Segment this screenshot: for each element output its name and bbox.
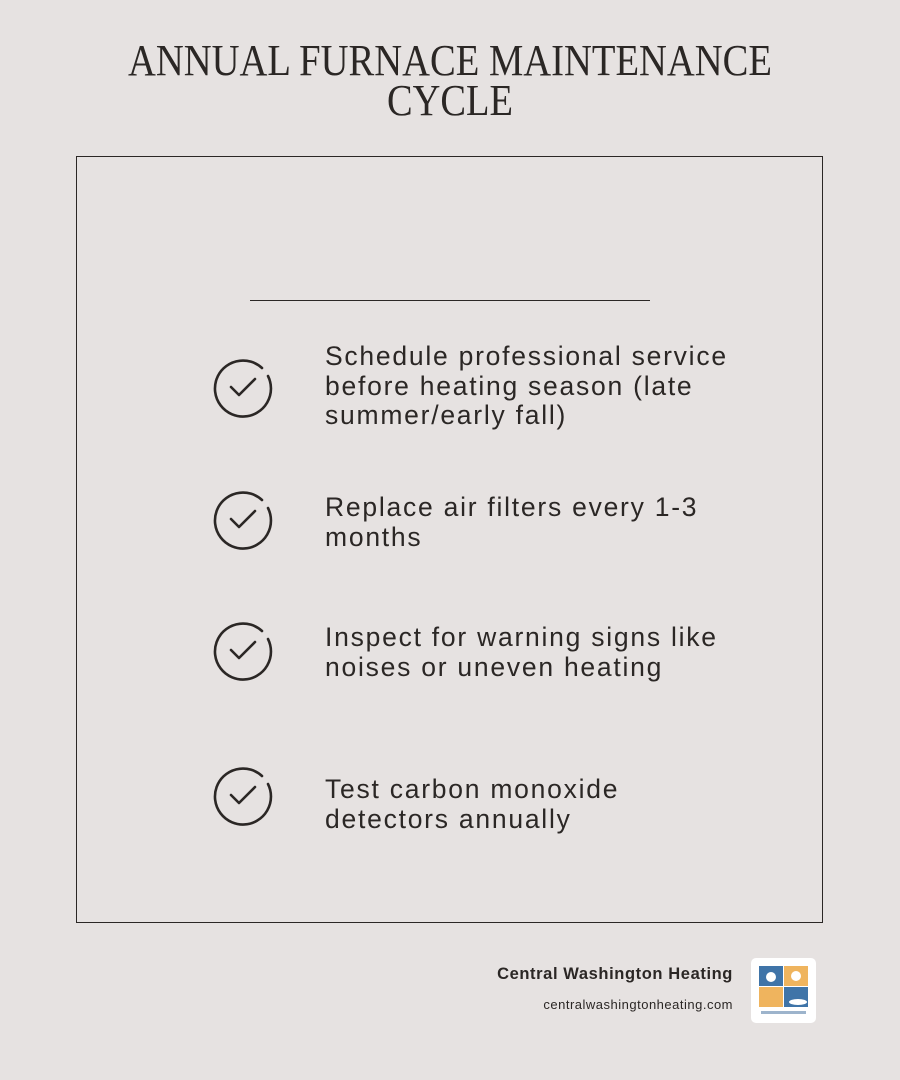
text: item 3: Inspect for warning signs like	[325, 622, 718, 652]
text: item 3: noises or uneven heating	[325, 652, 663, 682]
text: item 2: months	[325, 522, 422, 552]
footer: url: centralwashingtonheating.com	[543, 997, 733, 1012]
title	[128, 36, 772, 125]
text: item 1	[325, 341, 728, 430]
text: item 4: Test carbon monoxide	[325, 774, 619, 804]
text: item 4: detectors annually	[325, 804, 572, 834]
text: item 2: Replace air filters every 1-3	[325, 492, 698, 522]
text: item 4	[325, 774, 619, 834]
icon: check 2	[214, 491, 272, 550]
footer: company name: Central Washington Heating	[497, 965, 733, 983]
text: item 3	[325, 622, 718, 682]
panel: checklist	[76, 156, 823, 923]
title: ANNUAL FURNACE MAINTENANCE	[128, 36, 772, 85]
text: item 1: summer/early fall)	[325, 400, 567, 430]
icon: logo	[751, 958, 816, 1023]
text: item 1: before heating season (late	[325, 370, 693, 400]
icon: check 4	[214, 767, 272, 826]
icon: check 1	[214, 359, 272, 418]
icon: check 3	[214, 622, 272, 681]
text: item 1: Schedule professional service	[325, 341, 728, 371]
text: item 2	[325, 492, 698, 552]
title: CYCLE	[387, 76, 513, 125]
